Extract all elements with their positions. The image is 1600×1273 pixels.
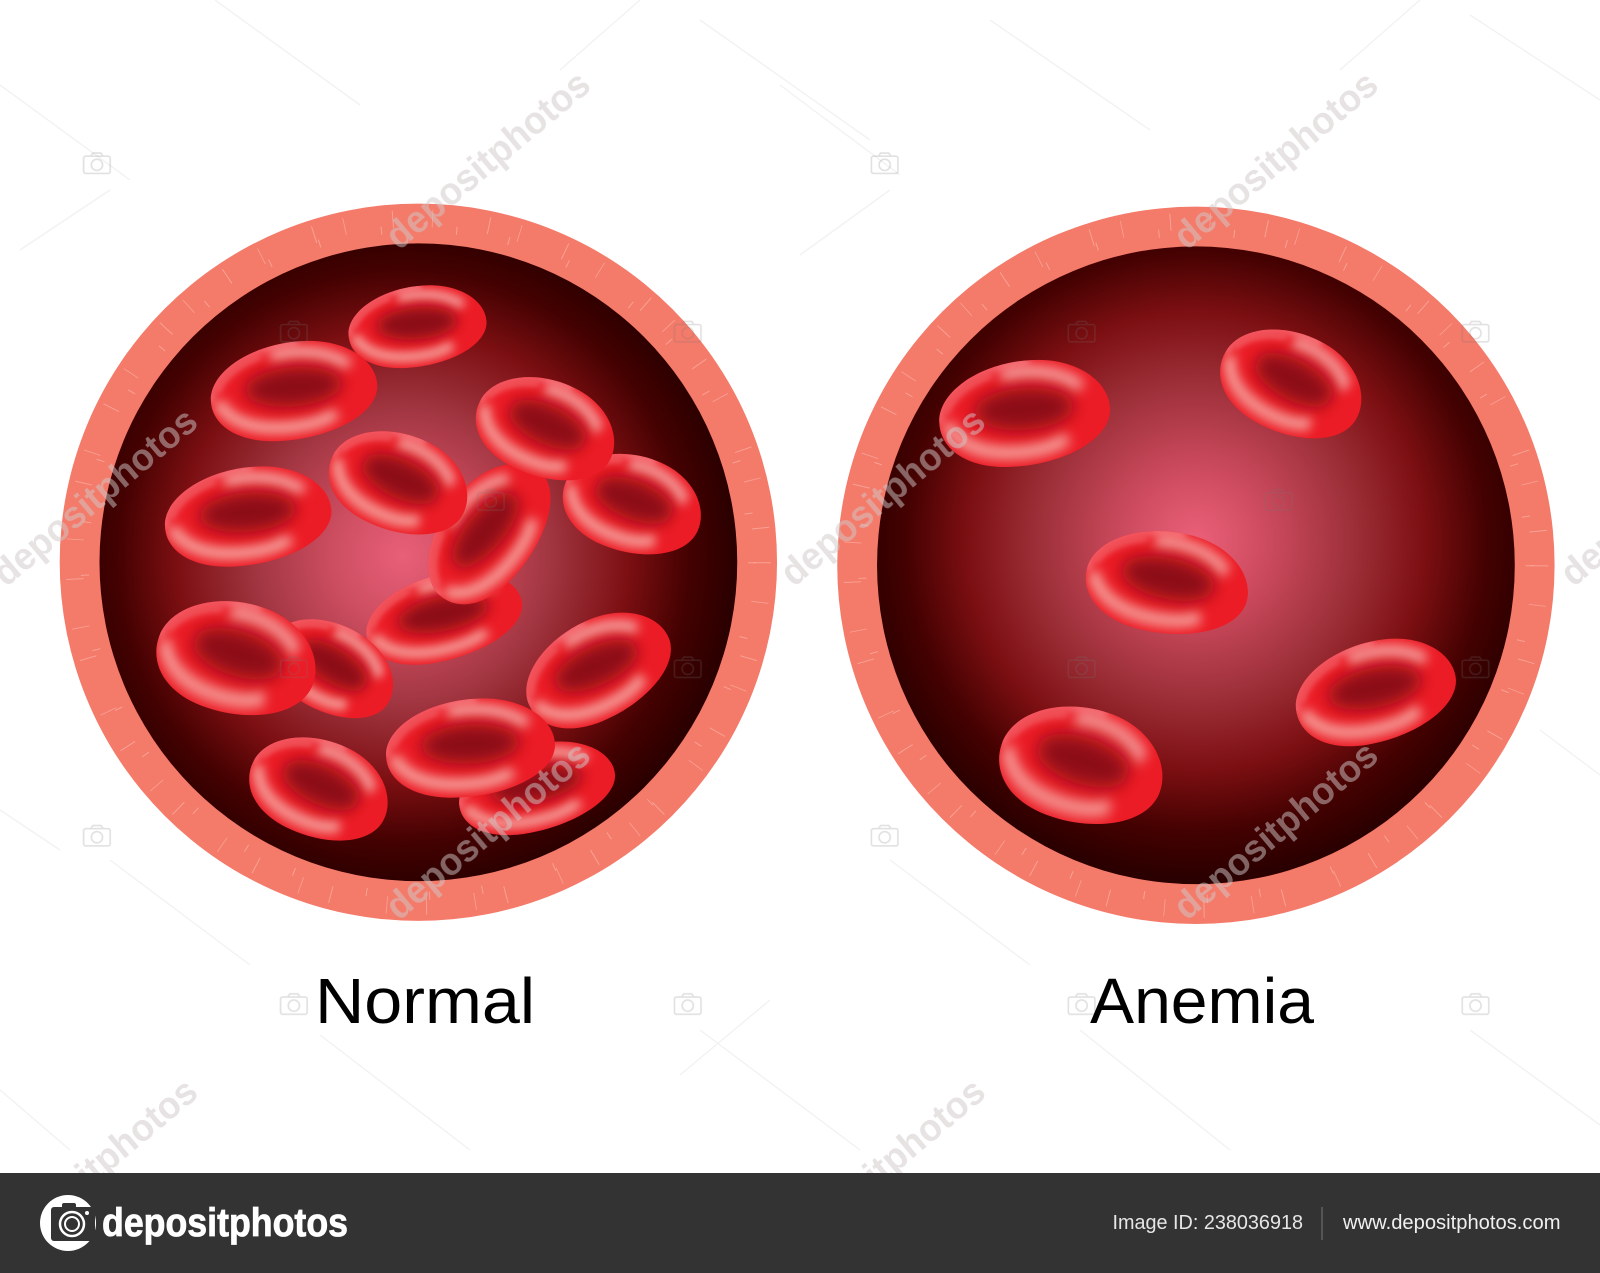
footer divider (1322, 1207, 1323, 1240)
red blood cell (304, 398, 494, 568)
red blood cell (926, 345, 1123, 481)
vessel wall: anemia (837, 207, 1555, 924)
image id: Image ID: 238036918 (1112, 1212, 1303, 1234)
red blood cell (374, 686, 566, 810)
red blood cell (224, 704, 415, 874)
red blood cell (243, 586, 421, 751)
red blood cell (540, 423, 725, 585)
label: Normal: Normal (315, 965, 535, 1037)
red blood cell (348, 550, 540, 684)
red blood cell (441, 721, 633, 855)
watermark icons (84, 153, 1489, 1014)
red blood cell (1193, 293, 1391, 474)
footer bar (0, 1173, 1600, 1273)
label: Anemia: Anemia (1090, 965, 1314, 1037)
red blood cell (1067, 505, 1268, 660)
logo wordmark: depositphotos (102, 1201, 348, 1245)
red blood cell (451, 344, 641, 514)
panel: anemia blood vessel (837, 207, 1555, 924)
red blood cell (1275, 616, 1476, 768)
red blood cell (132, 568, 341, 748)
cells: anemia (926, 293, 1476, 858)
website: www.depositphotos.com (1342, 1212, 1560, 1234)
icon: camera logo (40, 1195, 96, 1251)
blood lumen: anemia (877, 246, 1515, 884)
red blood cell (197, 326, 391, 456)
red blood cell (974, 673, 1189, 858)
panel: normal blood vessel (60, 204, 777, 921)
red blood cell (496, 582, 699, 757)
cells: normal (132, 273, 725, 874)
red blood cell (151, 451, 345, 581)
blood lumen: normal (99, 243, 737, 881)
vessel wall: normal (60, 204, 777, 921)
wall texture: anemia (852, 221, 1540, 909)
red blood cell (337, 273, 497, 380)
wall texture: normal (74, 218, 762, 906)
red blood cell (390, 430, 588, 636)
